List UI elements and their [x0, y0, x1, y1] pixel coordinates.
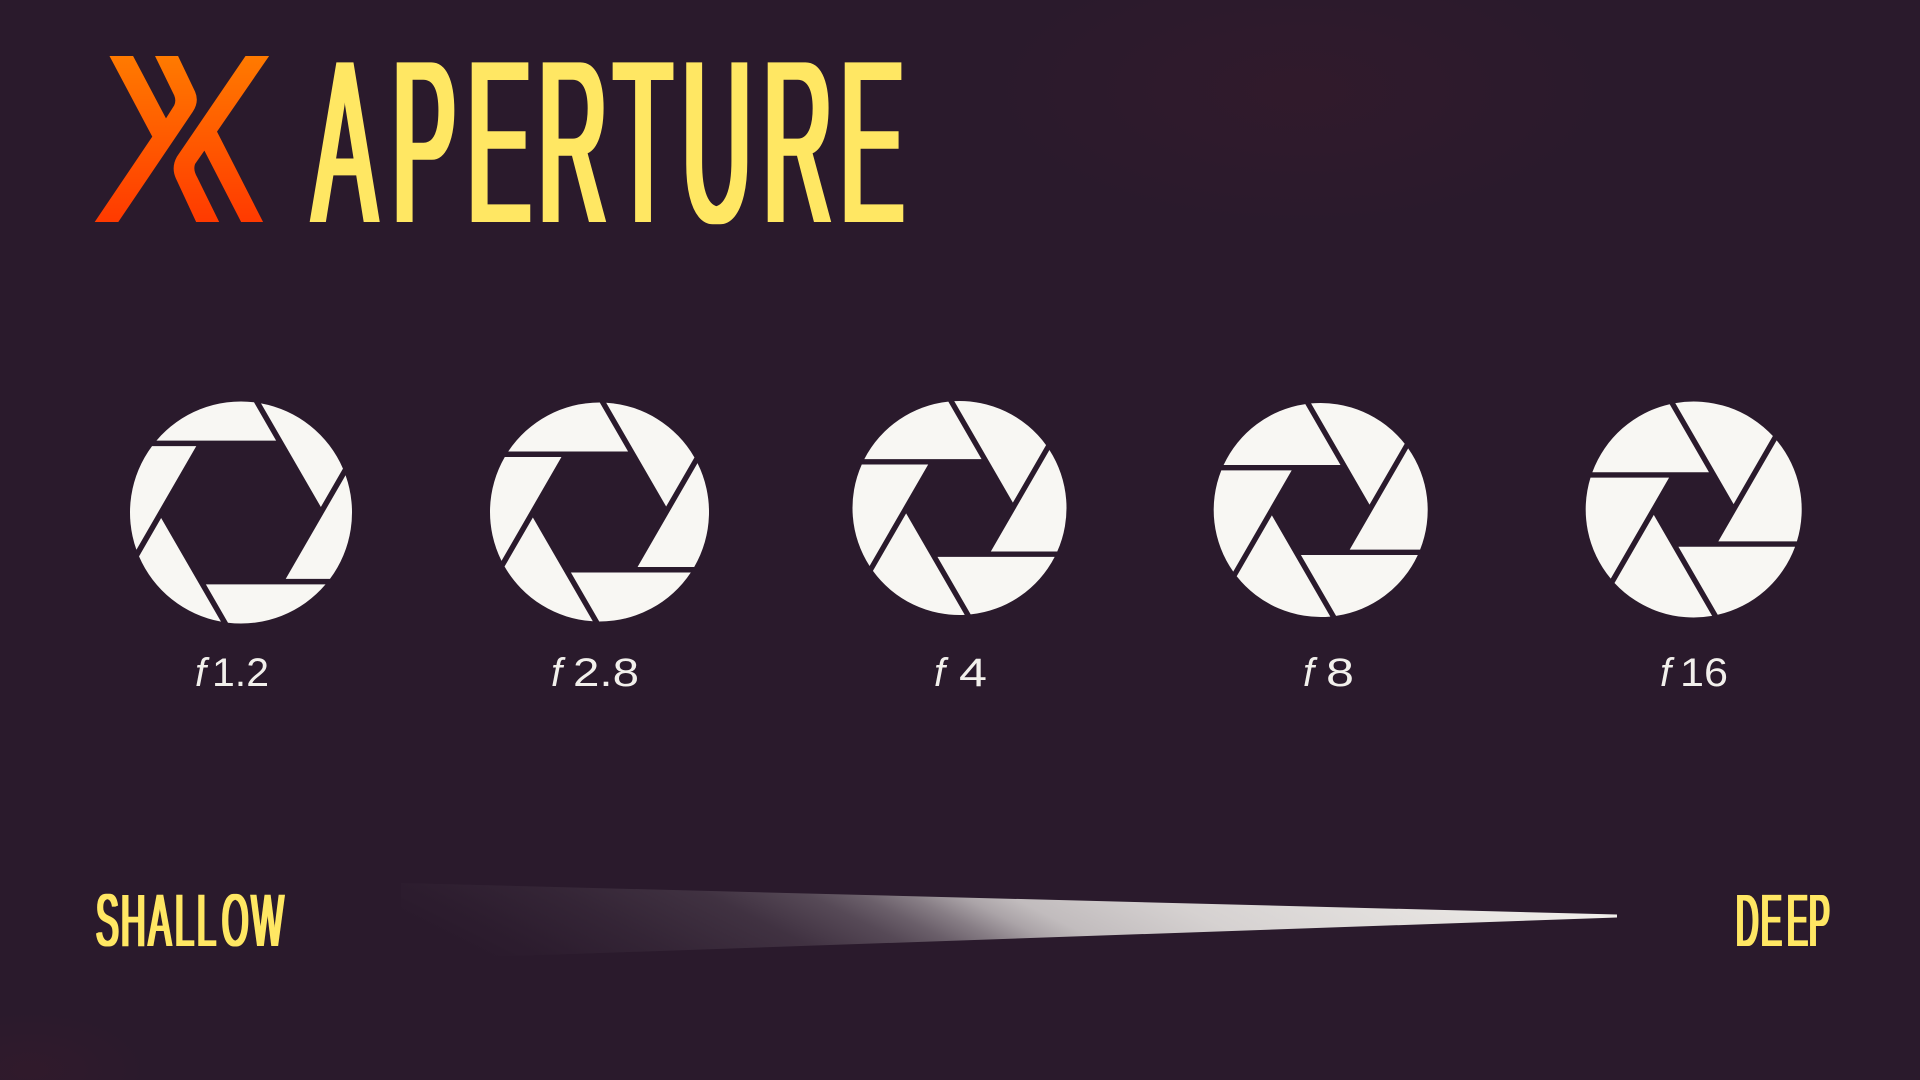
label: deep: DEEP: [1736, 881, 1830, 963]
label: f4: [934, 651, 987, 695]
label: f2.8: [551, 651, 639, 695]
label: f8: [1303, 651, 1354, 695]
title: APERTURE: [313, 11, 904, 272]
label: f8: f: [1303, 651, 1318, 695]
icon: aperture f4: [820, 372, 1099, 644]
icon: aperture f1.2: [103, 384, 379, 641]
icon: aperture f2.8: [459, 378, 740, 646]
depth of field wedge: [401, 883, 1617, 960]
label: f4: 4: [959, 651, 987, 695]
label: f16: [1660, 651, 1728, 695]
icon: aperture f16: [1552, 369, 1836, 650]
label: f4: f: [934, 651, 949, 695]
icon: aperture f8: [1180, 373, 1461, 647]
label: f1.2: 1.2: [212, 651, 269, 695]
label: f16: 16: [1680, 651, 1728, 695]
label: shallow: SHALLOW: [96, 880, 284, 963]
label: f8: 8: [1326, 651, 1354, 695]
icon: logo mark: [95, 56, 269, 222]
label: f2.8: f: [551, 651, 566, 695]
label: f2.8: 2.8: [573, 651, 639, 695]
label: f1.2: f: [195, 651, 210, 695]
label: f16: f: [1660, 651, 1675, 695]
